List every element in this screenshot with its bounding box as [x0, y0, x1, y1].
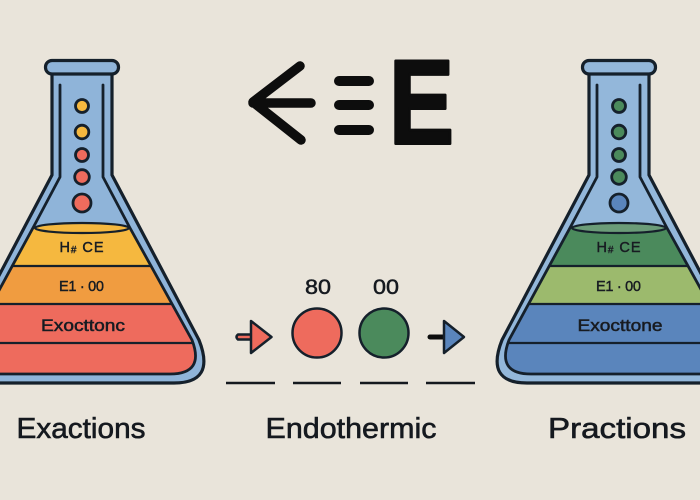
layer label: top: CE	[77, 240, 104, 256]
liquid surface	[572, 223, 666, 233]
icon: bold letter E: E	[389, 36, 454, 170]
flask: endothermic (right)	[487, 60, 700, 383]
flask rim	[46, 60, 118, 74]
layer label: top: H	[596, 240, 607, 256]
value: 00: 00	[373, 275, 399, 299]
liquid layers	[0, 228, 194, 373]
flask inner outline	[505, 85, 700, 374]
rising bubbles	[73, 100, 91, 212]
icon: left arrow	[253, 66, 311, 140]
layer label: top: #	[71, 245, 77, 256]
flask glass body	[0, 72, 204, 383]
layer label: middle: E1 · 00	[596, 279, 641, 295]
circle: red	[292, 308, 342, 358]
flask inner outline	[0, 85, 196, 374]
caption: Practions: Practions	[548, 413, 686, 445]
liquid surface	[35, 223, 129, 233]
layer label: top: H	[60, 240, 70, 256]
layer label: top: #	[608, 245, 614, 256]
icon: three bars	[339, 81, 369, 130]
value: 80: 80	[305, 275, 331, 299]
layer label: middle: E1 · 00	[59, 279, 104, 295]
flask rim	[582, 60, 656, 74]
flask: exothermic (left)	[0, 60, 220, 383]
circle: green	[360, 308, 408, 358]
layer label: top: CE	[614, 240, 641, 256]
caption: Exactions: Exactions	[16, 413, 146, 445]
layer label: bottom: Exocttone	[578, 317, 662, 335]
caption: Endothermic: Endothermic	[266, 413, 436, 445]
flask glass body	[497, 72, 700, 383]
infographic canvas	[0, 58, 700, 438]
icon: blue arrow	[430, 321, 464, 353]
rising bubbles	[610, 100, 628, 212]
icon: red arrow	[236, 321, 272, 353]
layer label: bottom: Exocttonc	[41, 317, 125, 335]
baseline rules	[226, 382, 475, 384]
liquid layers	[506, 228, 700, 373]
